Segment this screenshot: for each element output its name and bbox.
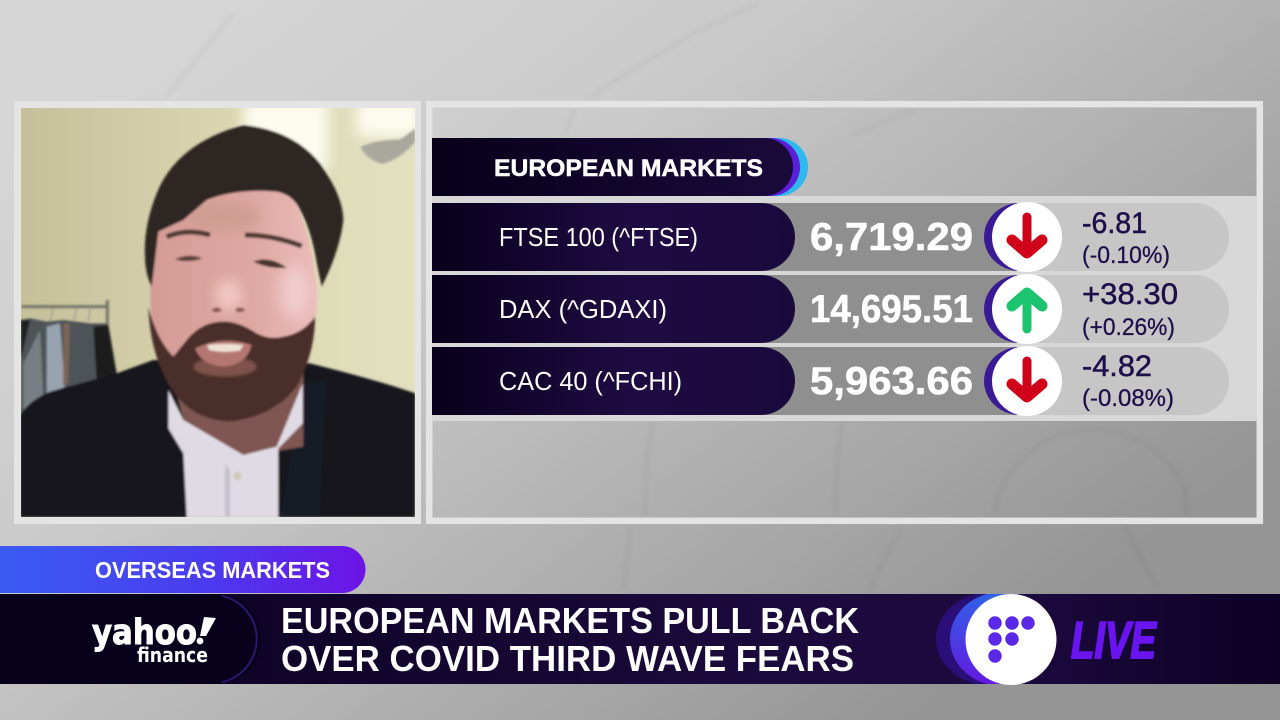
row: DAX: 14,695.51 bbox=[810, 288, 973, 331]
row: DAX: (+0.26%) bbox=[1082, 314, 1175, 341]
headline: EUROPEAN MARKETS PULL BACK bbox=[281, 600, 859, 641]
face bbox=[149, 189, 318, 358]
headline: OVER COVID THIRD WAVE FEARS bbox=[281, 638, 854, 679]
hair bbox=[145, 125, 343, 287]
tag: overseas markets bbox=[0, 546, 366, 593]
icon: up arrow bbox=[992, 274, 1062, 344]
logo: yahoo finance bbox=[0, 594, 261, 684]
logo: yahoo finance: finance bbox=[137, 643, 208, 667]
neck bbox=[176, 373, 306, 456]
beard bbox=[148, 307, 315, 422]
row: FTSE 100: 6,719.29 bbox=[810, 216, 973, 259]
row: CAC 40: 5,963.66 bbox=[810, 360, 973, 403]
icon: dot logo bbox=[988, 616, 1035, 663]
clothes rack bbox=[21, 300, 117, 415]
row: FTSE 100 bbox=[432, 202, 1229, 272]
row: DAX: +38.30 bbox=[1082, 278, 1178, 311]
row: FTSE 100: -6.81 bbox=[1082, 207, 1147, 240]
panel: video frame bbox=[14, 100, 421, 524]
row: CAC 40 bbox=[432, 346, 1229, 416]
shirt bbox=[168, 383, 303, 517]
logo: yahoo finance: yahoo bbox=[92, 613, 197, 653]
row: CAC 40: (-0.08%) bbox=[1082, 385, 1174, 412]
tag: overseas markets: OVERSEAS MARKETS bbox=[95, 557, 330, 583]
headline bbox=[281, 600, 859, 679]
eyes and brows bbox=[167, 232, 302, 312]
row: CAC 40: CAC 40 (^FCHI) bbox=[499, 366, 682, 396]
jacket bbox=[20, 360, 415, 517]
row: CAC 40: -4.82 bbox=[1082, 350, 1152, 383]
panel: market table bbox=[429, 104, 1260, 521]
row: DAX: DAX (^GDAXI) bbox=[499, 294, 667, 324]
row: DAX bbox=[432, 274, 1229, 344]
wall lamp bbox=[361, 128, 415, 164]
lower third banner bbox=[0, 592, 1280, 686]
icon: down arrow bbox=[992, 202, 1062, 272]
row: FTSE 100: FTSE 100 (^FTSE) bbox=[499, 222, 698, 252]
live badge bbox=[936, 592, 1157, 686]
icon: down arrow bbox=[992, 346, 1062, 416]
row: FTSE 100: (-0.10%) bbox=[1082, 242, 1170, 269]
live badge: LIVE bbox=[1071, 612, 1157, 670]
table heading: EUROPEAN MARKETS bbox=[494, 155, 763, 182]
table heading bbox=[432, 138, 808, 196]
